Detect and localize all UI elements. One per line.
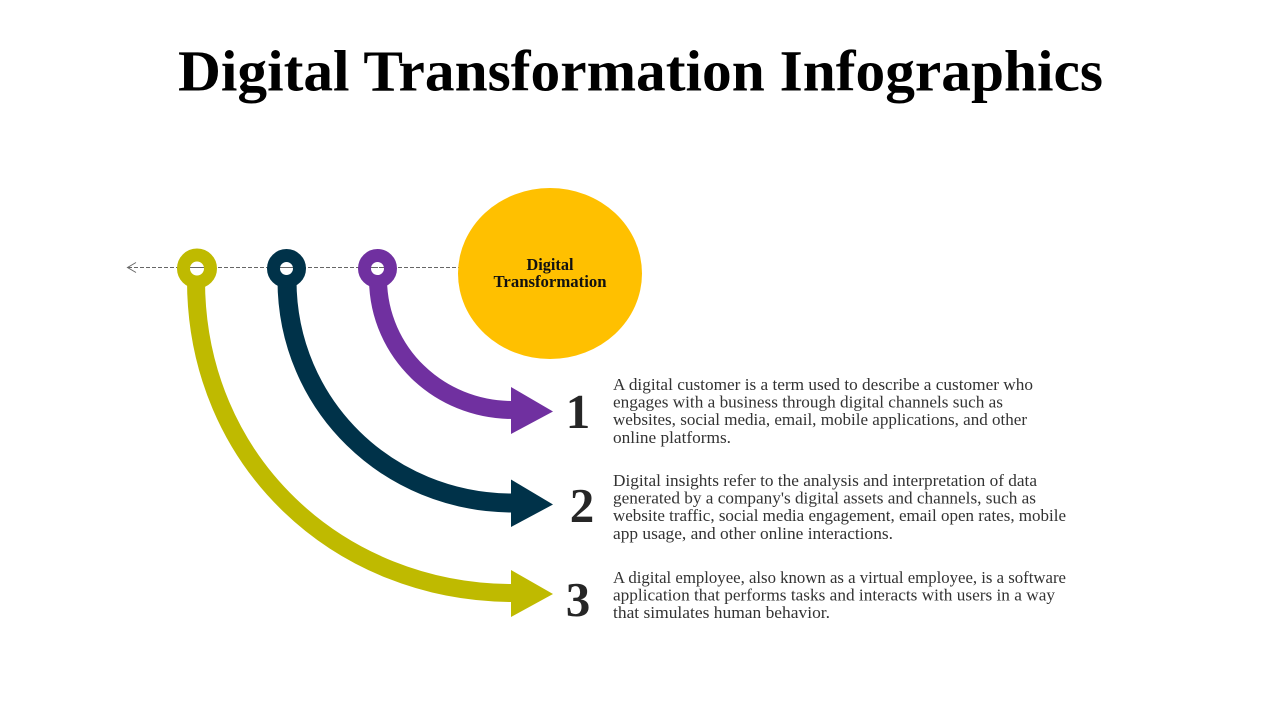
text block 1: websites, social media, email, mobile applications, and other <box>613 410 1028 429</box>
text block 3: A digital employee, also known as a virtual employee, is a software <box>613 568 1066 587</box>
number 1: 1 <box>566 384 590 439</box>
text block 3: application that performs tasks and interacts with users in a way <box>613 586 1056 604</box>
text block 1: online platforms. <box>613 428 731 447</box>
dashed timeline arrow <box>128 262 460 272</box>
central ellipse: Digital Transformation: Digital <box>526 255 574 274</box>
node: purple ring <box>364 256 390 282</box>
text block 2: Digital insights refer to the analysis and interpretation of data <box>613 471 1038 490</box>
arrow 3: olive curve <box>196 280 553 617</box>
number 3: 3 <box>566 572 590 627</box>
text block 2: app usage, and other online interactions. <box>613 524 893 543</box>
node: olive ring <box>184 255 210 282</box>
text block 2: generated by a company's digital assets and channels, such as <box>613 488 1036 508</box>
text block 3 <box>613 568 1066 622</box>
text block 1: A digital customer is a term used to describe a customer who <box>613 375 1033 394</box>
title: Digital Transformation Infographics <box>178 38 1103 104</box>
arrow 2: navy curve <box>287 280 553 527</box>
text block 1: engages with a business through digital channels such as <box>613 392 1003 412</box>
arrow 1: purple curve <box>378 280 553 434</box>
central ellipse: Digital Transformation <box>458 188 642 359</box>
central ellipse: Digital Transformation: Transformation <box>494 272 606 291</box>
text block 1 <box>613 375 1033 447</box>
text block 2: website traffic, social media engagement, email open rates, mobile <box>613 506 1066 525</box>
node: navy ring <box>274 256 300 282</box>
number 2: 2 <box>570 478 594 533</box>
text block 3: that simulates human behavior. <box>613 603 830 622</box>
text block 2 <box>613 471 1066 543</box>
